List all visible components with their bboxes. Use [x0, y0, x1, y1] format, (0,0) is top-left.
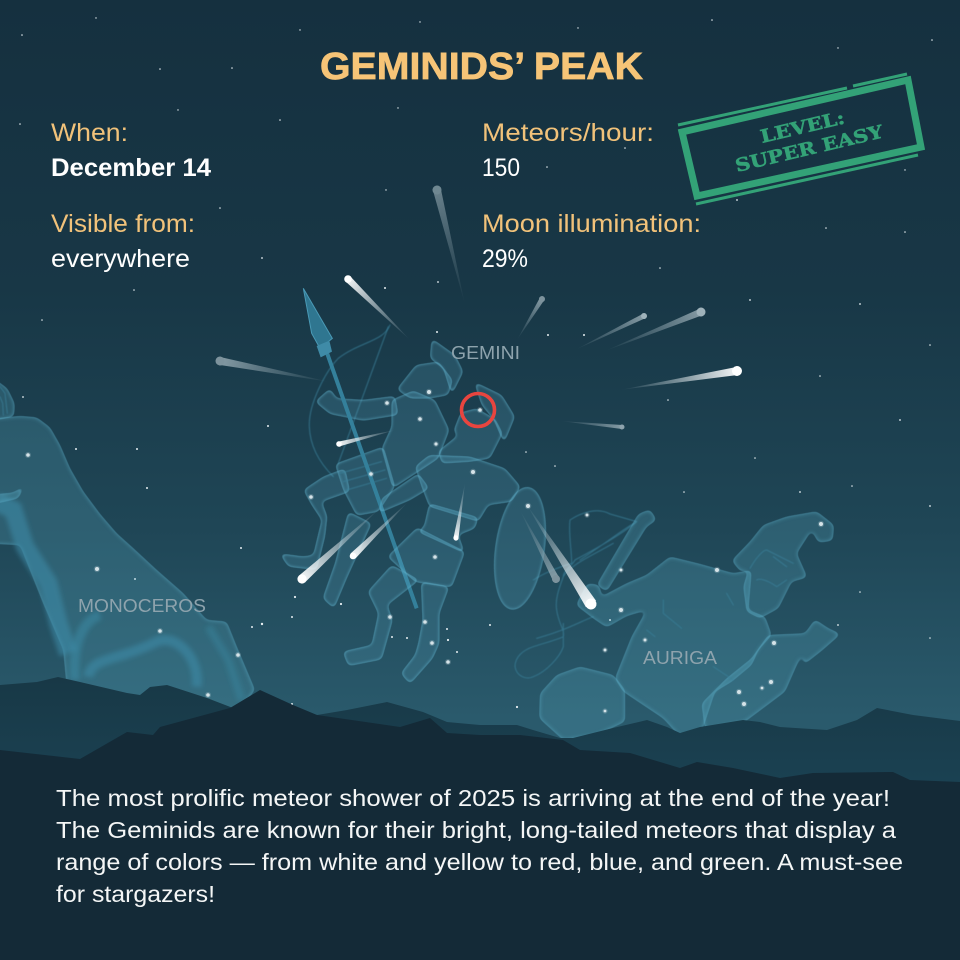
info: meteors per hour: 150 — [482, 154, 520, 182]
Monoceros head — [0, 373, 15, 422]
stamp: level super easy: LEVEL: — [758, 108, 847, 148]
Gemini left twin torso — [382, 391, 449, 488]
stamp: level super easy: SUPER EASY — [733, 121, 886, 177]
meteor 10 — [296, 505, 383, 585]
info: when — [51, 119, 211, 182]
info: meteors per hour: Meteors/hour: — [482, 119, 654, 147]
meteor 4 — [560, 419, 625, 430]
description paragraph: The Geminids are known for their bright, long-tailed meteors that display a — [56, 817, 897, 843]
meteor 7 — [343, 274, 413, 343]
Auriga second arm — [702, 619, 841, 730]
constellation label: Auriga: AURIGA — [643, 648, 717, 668]
meteor 6 — [514, 295, 546, 342]
description paragraph — [56, 785, 903, 907]
info: visible from: everywhere — [51, 245, 190, 273]
meteor 13 — [522, 502, 599, 612]
radiant marker circle — [462, 394, 494, 426]
near mountain ridge — [0, 690, 960, 960]
constellation label: Gemini: GEMINI — [451, 343, 520, 363]
Monoceros neck fold — [0, 485, 25, 505]
meteor 1 — [620, 365, 743, 395]
Monoceros mane lines — [0, 387, 7, 415]
Monoceros haunch band — [88, 640, 197, 687]
Gemini right twin front leg — [401, 582, 449, 684]
description paragraph: for stargazers! — [56, 881, 215, 907]
Gemini left twin front leg — [323, 512, 372, 609]
constellation: Monoceros — [0, 373, 255, 717]
Gemini bow — [309, 325, 390, 477]
description paragraph: range of colors — from white and yellow to red, blue, and green. A must-see — [56, 849, 903, 875]
Auriga goat outline — [515, 511, 637, 678]
far mountain ridge — [0, 677, 960, 800]
meteor 2 — [603, 306, 707, 355]
Monoceros belly band — [74, 615, 100, 680]
Gemini kilt pleats — [340, 462, 387, 490]
meteor 9 — [336, 427, 396, 447]
Gemini spear — [303, 288, 417, 608]
Monoceros body — [0, 416, 255, 717]
Gemini right twin crest — [474, 382, 515, 443]
Gemini right twin torso — [415, 455, 521, 522]
description paragraph: The most prolific meteor shower of 2025 is arriving at the end of the year! — [56, 785, 890, 811]
meteor 3 — [574, 312, 648, 353]
Gemini right twin forward arm — [378, 473, 429, 513]
info: moon illumination: 29% — [482, 245, 528, 273]
scattered stars — [19, 17, 933, 708]
meteor 12 — [453, 482, 468, 541]
stamp: level super easy — [678, 74, 921, 204]
info: when: December 14 — [51, 154, 211, 182]
meteors — [215, 185, 743, 612]
Gemini left twin helmet — [397, 362, 453, 398]
Auriga staff — [597, 509, 657, 592]
info: visible from — [51, 210, 195, 273]
Gemini left twin crest — [430, 338, 463, 395]
constellation: Auriga — [515, 509, 841, 740]
Gemini left twin kilt — [335, 447, 395, 516]
Monoceros front leg band — [0, 502, 68, 653]
constellation label: Monoceros: MONOCEROS — [78, 596, 206, 616]
Gemini left twin arm — [315, 388, 398, 421]
Auriga left knee — [539, 667, 625, 740]
meteor 8 — [215, 356, 331, 386]
meteor 11 — [348, 500, 410, 561]
title: GEMINIDS’ PEAK — [320, 46, 644, 88]
info: visible from: Visible from: — [51, 210, 195, 238]
Gemini right twin helmet — [438, 408, 503, 463]
info: moon illumination: Moon illumination: — [482, 210, 701, 238]
meteor 5 — [432, 185, 469, 306]
Gemini right twin kilt — [387, 527, 465, 587]
Auriga hat — [732, 511, 834, 618]
Gemini shield — [487, 484, 553, 613]
Gemini left twin rear leg — [279, 468, 350, 570]
Gemini bowstring — [338, 327, 388, 463]
Auriga face lines — [647, 550, 793, 680]
Auriga torso and arm — [576, 557, 772, 737]
constellation stars — [26, 390, 823, 712]
Gemini right twin waist — [417, 503, 478, 553]
info: when: When: — [51, 119, 128, 147]
info: meteors per hour — [482, 119, 654, 182]
Gemini right twin rear leg — [343, 565, 419, 666]
meteor 14 — [516, 508, 561, 584]
Monoceros hind contour — [208, 627, 242, 700]
constellation: Gemini — [279, 288, 553, 684]
info: moon illumination — [482, 210, 701, 273]
